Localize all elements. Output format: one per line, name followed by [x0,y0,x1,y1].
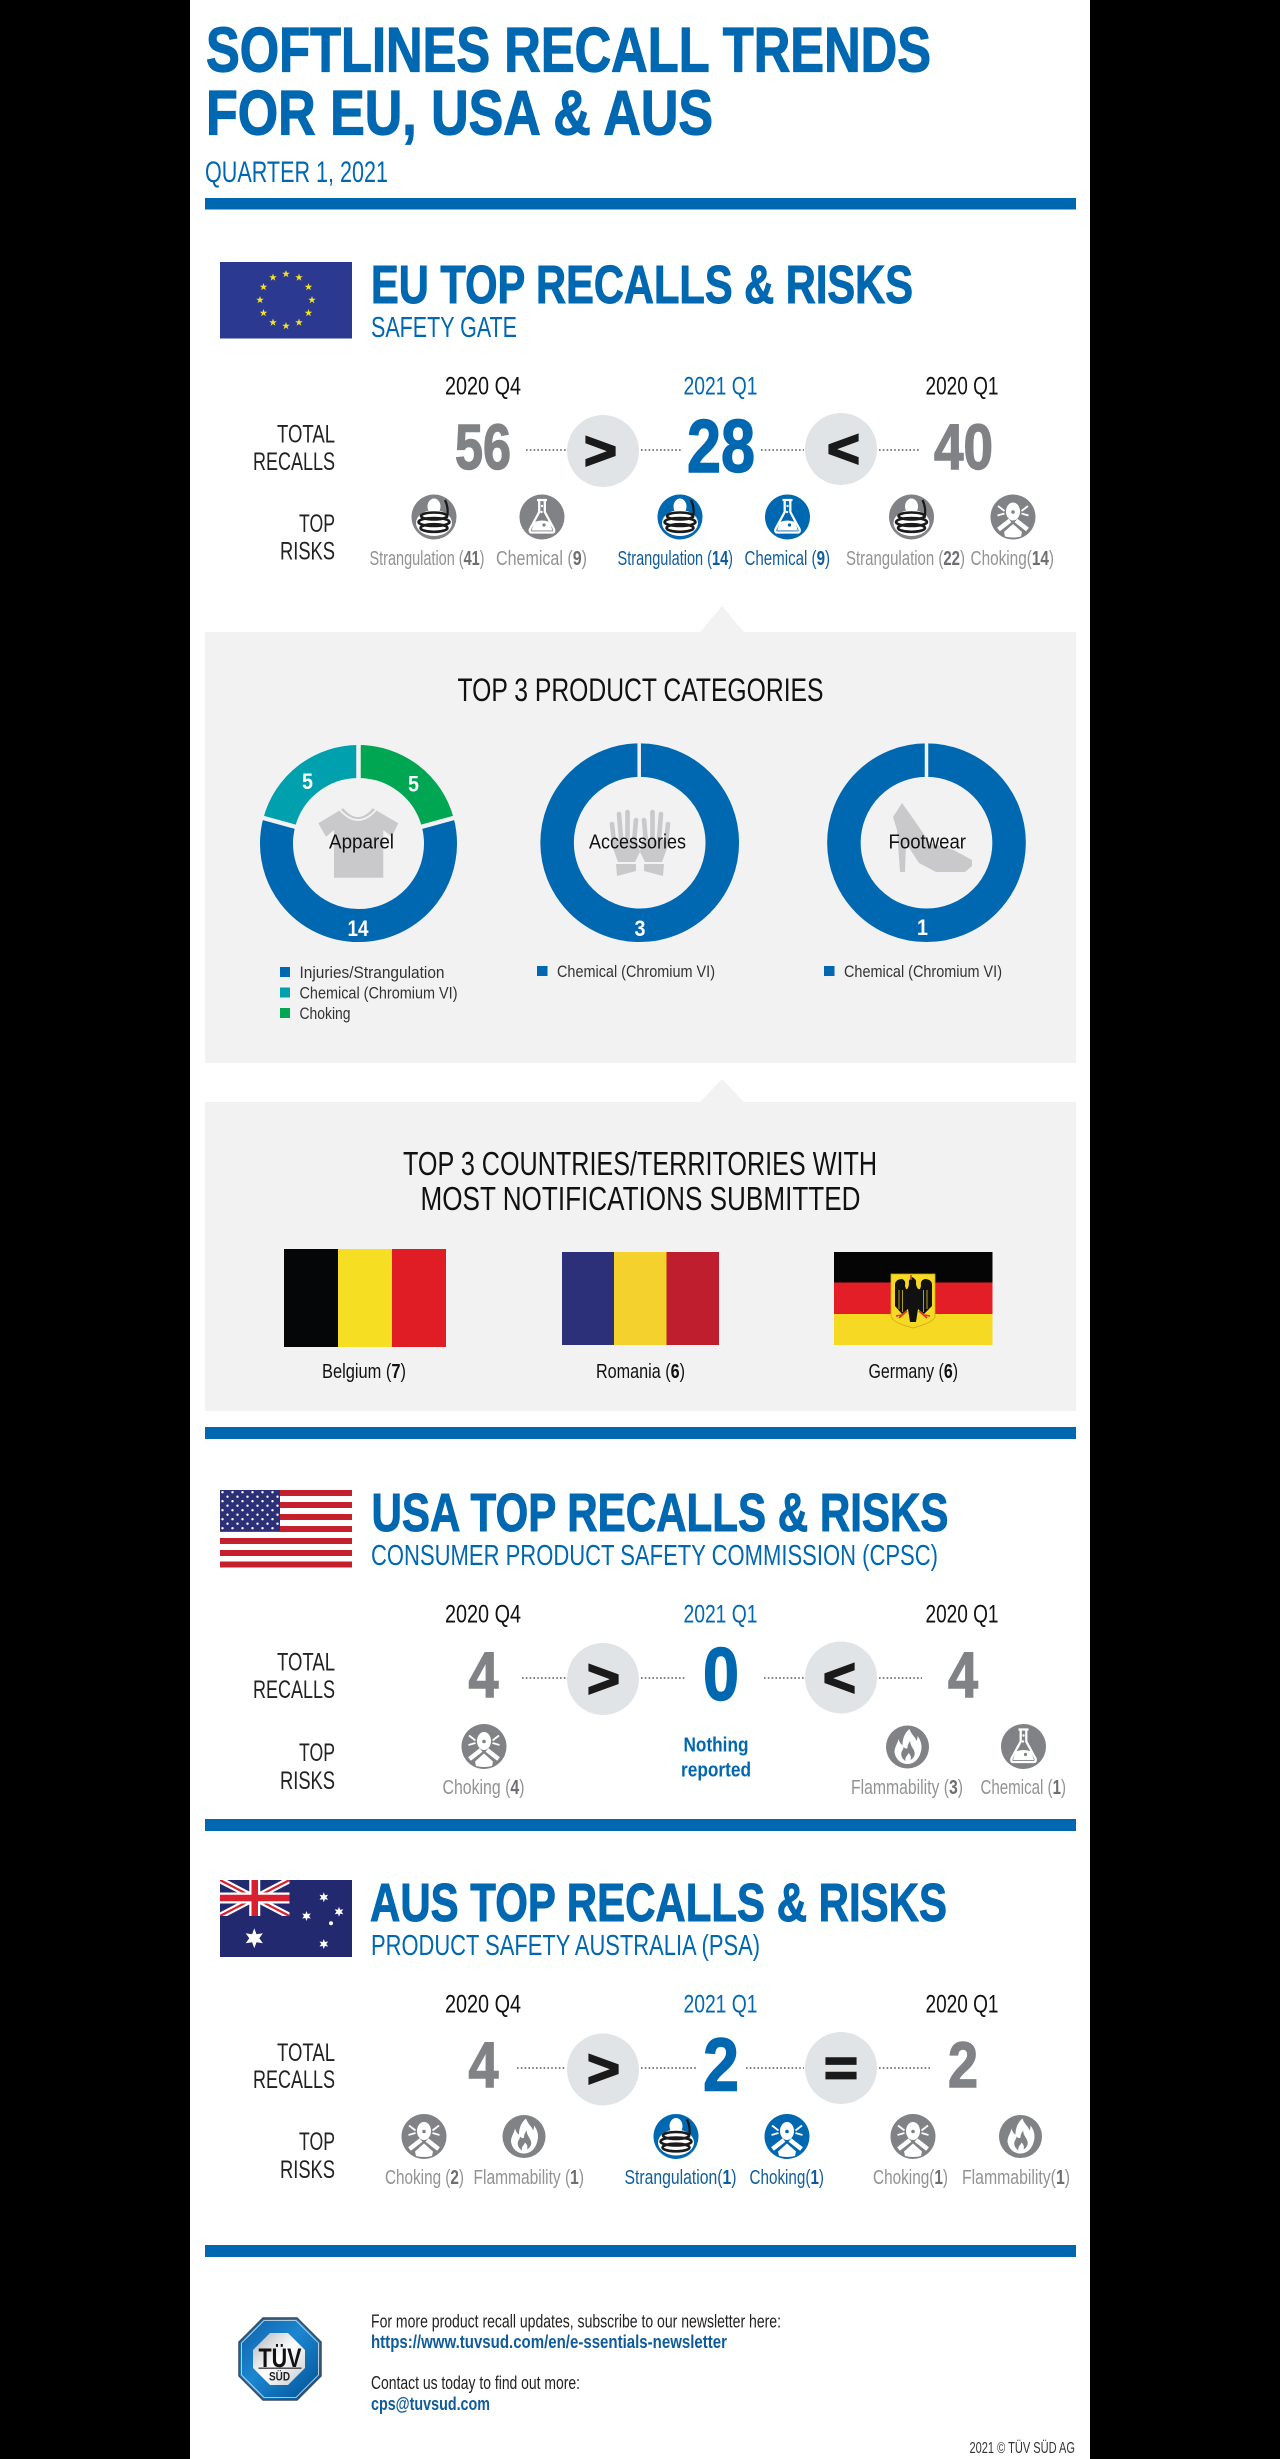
period labels [445,1600,998,1628]
risk labels: Strangulation (41) [370,547,484,570]
donut: apparel: Apparel [329,830,394,854]
legend: apparel [280,963,458,1023]
legend: apparel: Choking [300,1004,350,1023]
white page panel [190,0,1090,2459]
period labels: 2020 Q4 [445,1990,521,2018]
footer contact text: For more product recall updates, subscribe to our newsletter here: [371,2310,781,2332]
nothing reported note [681,1734,751,1782]
section: EU recalls and risks [220,255,1054,570]
total recalls row label: RECALLS [253,1676,335,1704]
top risks row label: TOP [299,1739,335,1767]
recall counts and comparison: 0 [703,1632,739,1716]
flag: Germany [834,1252,992,1345]
top risks row label: RISKS [280,538,335,566]
recall counts and comparison: > [587,2039,620,2099]
period labels [445,1990,998,2018]
divider bar [205,1819,1076,1831]
risk icons [462,1724,1046,1769]
recall counts and comparison: < [827,419,860,479]
period labels: 2020 Q1 [926,1600,998,1628]
risk labels: Choking(1) [873,2166,948,2189]
risk labels: Strangulation (22) [846,547,965,570]
logo: TUV SUD: SÜD [269,2370,290,2384]
risk labels: Strangulation(1) [624,2166,736,2189]
risk icons [412,494,1036,540]
top risks row label: TOP [299,510,335,538]
risk labels: Choking (4) [442,1776,524,1799]
legend: footwear: Chemical (Chromium VI) [844,962,1002,981]
EU heading: EU TOP RECALLS & RISKS [371,255,913,315]
top risks row label: TOP [299,2128,335,2156]
risk labels: Flammability (3) [851,1776,963,1799]
total recalls row label [253,2039,335,2094]
AUS flag [220,1880,352,1957]
legend: accessories: Chemical (Chromium VI) [557,962,715,981]
donut: accessories: 3 [634,916,646,941]
country labels [322,1360,958,1383]
title: FOR EU, USA & AUS [206,78,713,148]
period labels: 2020 Q4 [445,372,521,400]
total recalls row label: RECALLS [253,2066,335,2094]
recall counts and comparison: 4 [468,1639,499,1711]
risk labels: Chemical (1) [980,1776,1066,1799]
nothing reported note: Nothing [684,1734,748,1756]
icon: high heel shoe [893,803,972,872]
risk labels [385,2166,1070,2189]
EU subheading: SAFETY GATE [371,312,517,344]
recall counts and comparison: < [823,1648,856,1708]
AUS subheading: PRODUCT SAFETY AUSTRALIA (PSA) [371,1930,760,1962]
risk labels: Strangulation (14) [618,547,733,570]
period labels: 2020 Q1 [926,372,998,400]
infographic page [190,0,1090,2459]
top risks row label [280,2128,335,2184]
USA heading: USA TOP RECALLS & RISKS [372,1483,948,1543]
risk labels [370,547,1054,570]
footer contact text: Contact us today to find out more: [371,2372,580,2393]
risk labels: Choking(14) [970,547,1054,570]
logo: TUV SUD [239,2318,321,2400]
total recalls row label: TOTAL [277,2039,335,2067]
USA subheading: CONSUMER PRODUCT SAFETY COMMISSION (CPSC) [371,1540,938,1572]
panel heading: TOP 3 PRODUCT CATEGORIES [458,672,824,708]
donut: footwear: Footwear [888,830,966,854]
panel: top 3 countries [205,1079,1076,1411]
total recalls row label [253,420,335,476]
total recalls row label: RECALLS [253,448,335,476]
legend: apparel: Injuries/Strangulation [300,963,444,982]
recall counts and comparison [455,404,993,488]
copyright: 2021 © TÜV SÜD AG [970,2439,1075,2457]
country labels: Germany (6) [868,1360,958,1383]
period labels: 2020 Q1 [926,1990,998,2018]
risk labels: Choking(1) [750,2166,824,2189]
recall counts and comparison: 2 [948,2029,978,2101]
recall counts and comparison [468,2022,978,2106]
period labels [445,372,998,400]
donut: apparel: 14 [348,916,369,941]
recall counts and comparison [468,1632,978,1716]
risk labels: Flammability (1) [474,2166,584,2189]
section: USA recalls and risks [220,1483,1066,1799]
donut: footwear [844,740,1009,940]
footer contact text: https://www.tuvsud.com/en/e-ssentials-newsletter [371,2331,727,2352]
risk labels: Choking (2) [385,2166,464,2189]
icon: t-shirt [318,808,398,878]
recall counts and comparison: > [587,1649,620,1709]
top risks row label: RISKS [280,1767,335,1795]
risk labels: Flammability(1) [962,2166,1070,2189]
risk labels: Chemical (9) [496,547,587,570]
logo: TUV SUD: TÜV [258,2343,302,2373]
icon: gloves [610,812,670,876]
donut: accessories [557,740,722,941]
divider bar [205,1427,1076,1439]
divider bar [205,198,1076,210]
panel: top 3 product categories [205,606,1076,1063]
donut: apparel: 5 [302,769,313,794]
divider bar [205,2245,1076,2257]
flag: Romania [562,1252,719,1345]
legend: apparel: Chemical (Chromium VI) [300,984,458,1002]
period labels: 2021 Q1 [684,372,758,400]
recall counts and comparison: 4 [468,2029,499,2101]
footer contact text: cps@tuvsud.com [371,2393,490,2414]
risk icons [402,2114,1042,2159]
panel heading: MOST NOTIFICATIONS SUBMITTED [420,1180,860,1217]
recall counts and comparison: 56 [455,411,511,483]
period labels: 2020 Q4 [445,1600,521,1628]
subtitle: quarter: QUARTER 1, 2021 [205,156,388,189]
recall counts and comparison: 2 [703,2022,739,2106]
country labels: Belgium (7) [322,1360,406,1383]
total recalls row label: TOTAL [277,1648,335,1676]
panel heading [403,1145,877,1217]
title [206,16,931,148]
top risks row label [280,1739,335,1795]
USA flag [220,1490,352,1568]
nothing reported note: reported [681,1758,751,1782]
period labels: 2021 Q1 [684,1600,758,1628]
top risks row label [280,510,335,566]
period labels: 2021 Q1 [684,1990,758,2018]
donut: footwear: 1 [917,915,928,940]
flag: Belgium [284,1249,446,1347]
total recalls row label [253,1648,335,1704]
recall counts and comparison: 4 [948,1639,978,1711]
country labels: Romania (6) [596,1360,685,1383]
AUS heading: AUS TOP RECALLS & RISKS [370,1873,947,1933]
panel heading: TOP 3 COUNTRIES/TERRITORIES WITH [403,1145,877,1182]
recall counts and comparison: = [824,2038,858,2098]
recall counts and comparison: 40 [934,411,993,483]
donut: accessories: Accessories [589,830,686,854]
risk labels: Chemical (9) [744,547,830,570]
donut: apparel: 5 [408,772,419,796]
title: SOFTLINES RECALL TRENDS [206,16,931,86]
recall counts and comparison: > [584,421,617,481]
EU flag [220,262,352,338]
footer contact text [371,2310,781,2414]
total recalls row label: TOTAL [277,420,335,448]
recall counts and comparison: 28 [687,404,755,488]
section: AUS recalls and risks [220,1873,1070,2189]
risk labels [442,1776,1066,1799]
top risks row label: RISKS [280,2156,335,2184]
donut: apparel [258,740,459,941]
